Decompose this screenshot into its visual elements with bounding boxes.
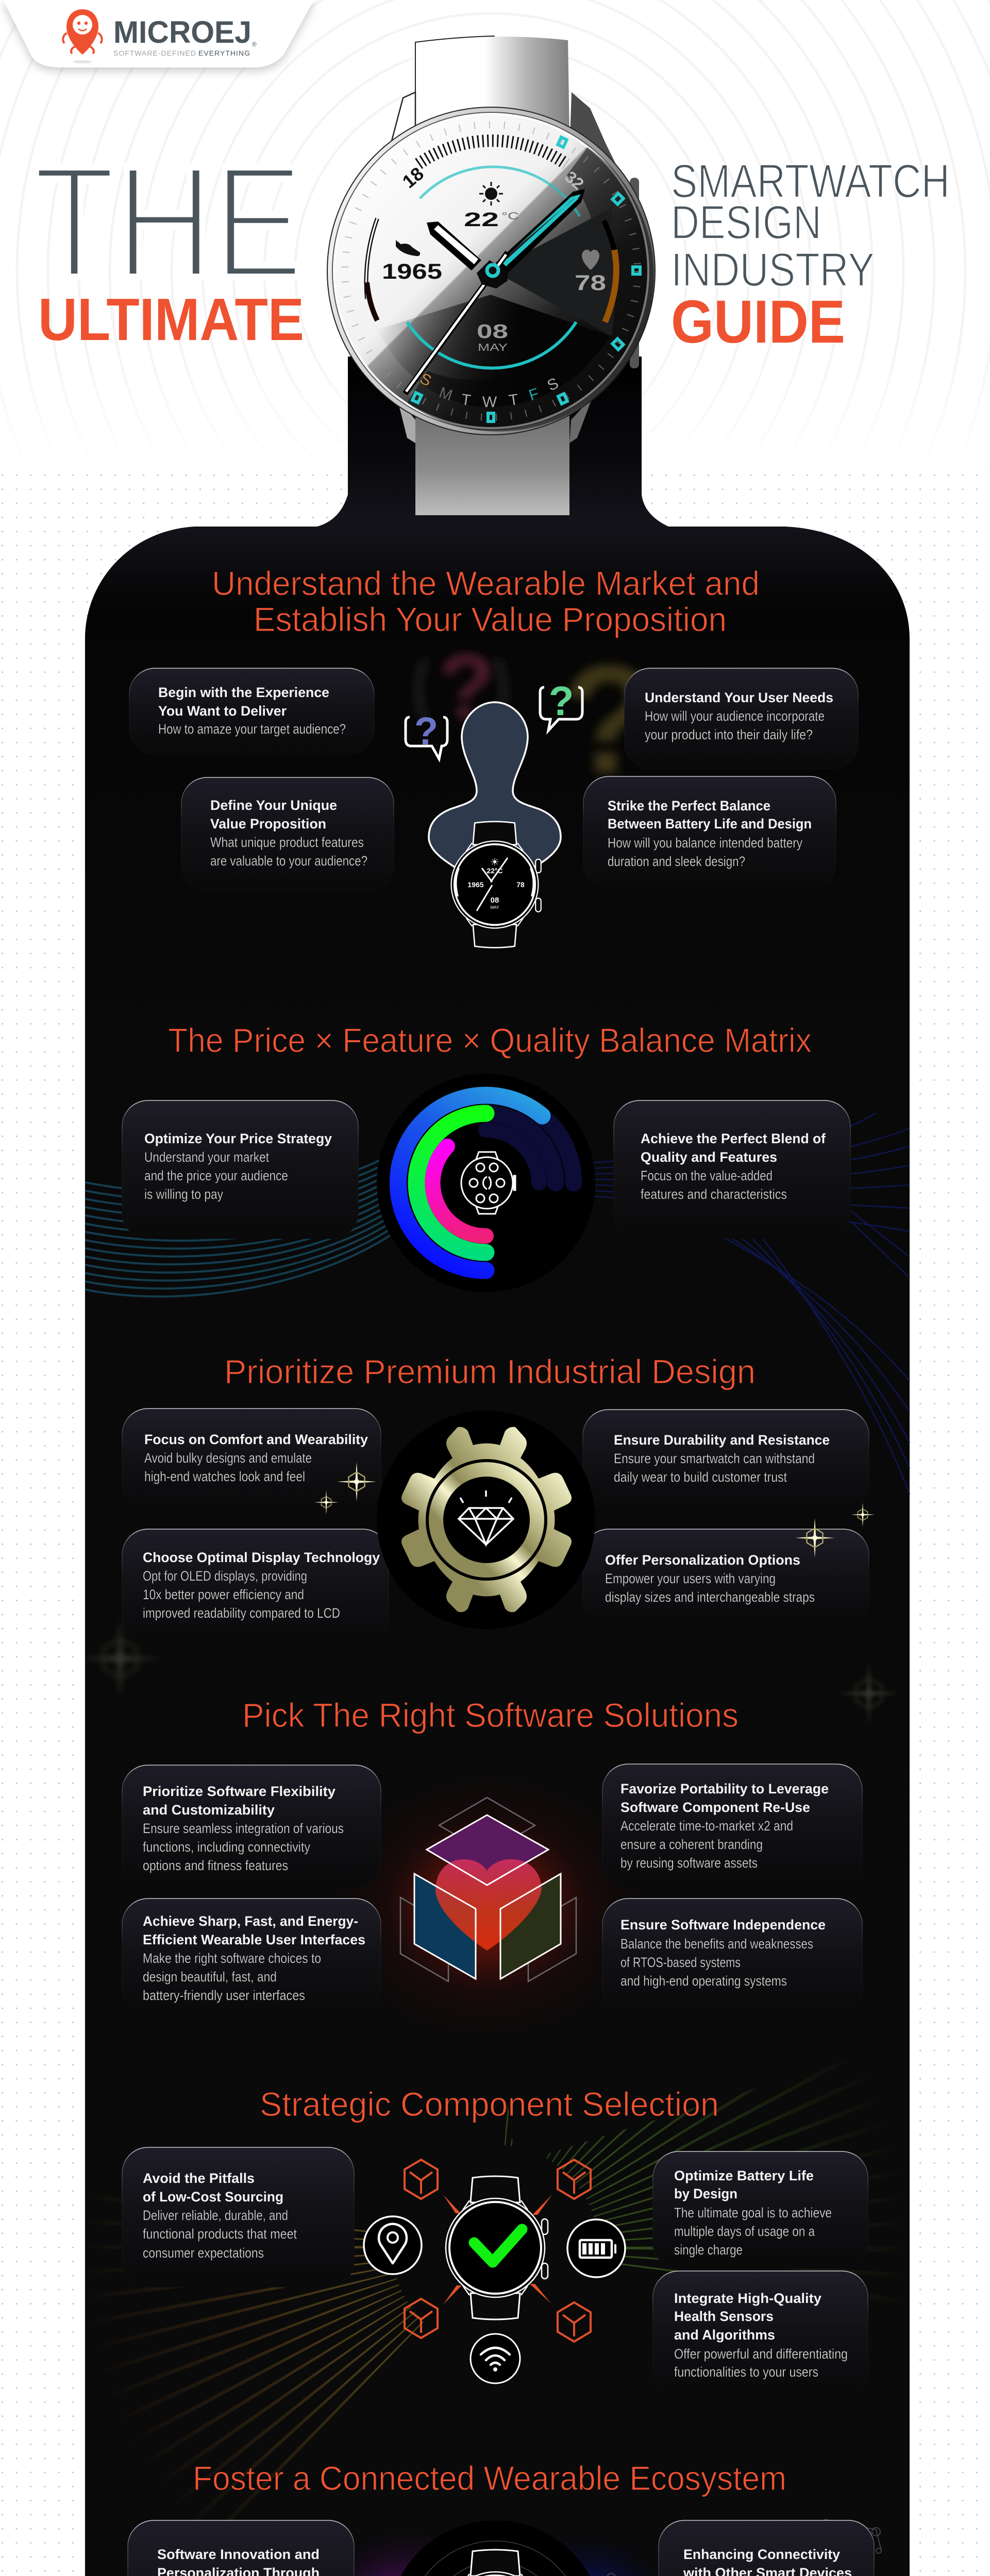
weekdays: T — [508, 391, 519, 409]
background: concentric rings — [0, 0, 990, 378]
gauge label 32: 32 — [562, 167, 588, 193]
card: app ecosystems — [128, 2520, 354, 2576]
card: achieve the perfect blend: Achieve the Perfect Blend of — [641, 1131, 826, 1146]
card: optimal display technology: Opt for OLED displays, providing — [143, 1568, 307, 1584]
icon: hexagon top left — [405, 2160, 438, 2199]
card: software independence: Ensure Software Independence — [620, 1917, 826, 1933]
card: optimal display technology — [122, 1529, 389, 1643]
card: sharp fast interfaces: Efficient Wearable User Interfaces — [143, 1932, 365, 1947]
icon: watch with share — [387, 2520, 603, 2576]
card: software independence: of RTOS-based systems — [620, 1955, 741, 1970]
card: low-cost sourcing: of Low-Cost Sourcing — [143, 2189, 283, 2205]
card: comfort and wearability: Focus on Comfort and Wearability — [144, 1432, 368, 1447]
gauge label 18: 18 — [398, 163, 428, 192]
card: define your unique value proposition — [181, 777, 394, 890]
card: software independence: Balance the benefits and weaknesses — [620, 1936, 813, 1952]
outer dark ring — [407, 147, 654, 432]
icon: green question bubble: ? — [549, 678, 574, 724]
dark content panel — [85, 357, 910, 2576]
weekdays: F — [527, 385, 541, 404]
blurred background question marks: ? — [438, 635, 495, 739]
hero smartwatch — [327, 36, 655, 515]
card: optimize your price strategy: Optimize Your Price Strategy — [144, 1131, 332, 1146]
heading: component selection: Strategic Component Selection — [260, 2085, 719, 2123]
hour hand — [427, 222, 481, 270]
card: portability and re-use: Software Component Re-Use — [620, 1800, 810, 1815]
card: durability and resistance: daily wear to build customer trust — [614, 1469, 787, 1485]
card: understand your user needs: Understand Your User Needs — [645, 690, 833, 705]
card: begin with the experience: You Want to Deliver — [158, 703, 287, 719]
header: logo tab: EVERYTHING — [198, 49, 250, 57]
card: software flexibility: Prioritize Software Flexibility — [143, 1784, 335, 1799]
card: strike the perfect balance: How will you balance intended battery — [608, 835, 803, 851]
crowns — [630, 178, 639, 224]
card: optimal display technology: Choose Optimal Display Technology — [143, 1550, 380, 1565]
heading: connected ecosystem: Foster a Connected Wearable Ecosystem — [193, 2459, 786, 2497]
card: optimal display technology: 10x better power efficiency and — [143, 1587, 304, 1602]
icon: watch on person: 78 — [516, 880, 525, 889]
cyan bezel markers — [412, 137, 640, 421]
icon: watch on person: MAY — [491, 905, 499, 910]
icon: green question bubble — [540, 678, 582, 731]
background: radiating rays — [227, 1980, 763, 2516]
weather icon — [479, 182, 503, 206]
icon: sparkle right small — [850, 1502, 875, 1527]
card: define your unique value proposition: Define Your Unique — [210, 798, 337, 813]
card: health sensors: Integrate High-Quality — [674, 2291, 821, 2306]
date — [477, 321, 508, 353]
icon: sparkle lower left — [314, 1490, 339, 1515]
card: understand your user needs — [625, 668, 858, 769]
card: software flexibility: Ensure seamless integration of various — [143, 1821, 344, 1836]
blurred background question marks: ? — [562, 633, 656, 806]
title: THE: THE — [33, 132, 304, 311]
icon: small watch in rings — [461, 1152, 515, 1214]
icon: battery — [567, 2219, 625, 2277]
card: sharp fast interfaces: design beautiful, fast, and — [143, 1969, 277, 1985]
title: INDUSTRY: INDUSTRY — [671, 244, 875, 296]
card: low-cost sourcing: Deliver reliable, durable, and — [143, 2208, 288, 2223]
heading: understand the wearable market — [212, 564, 760, 638]
background: navy waves — [582, 1113, 910, 1494]
step gauge — [366, 218, 377, 320]
card: low-cost sourcing: Avoid the Pitfalls — [143, 2171, 255, 2186]
title: DESIGN: DESIGN — [671, 196, 821, 249]
icon: gold gear with diamond — [377, 1411, 595, 1629]
center hub — [477, 260, 508, 289]
card: software flexibility — [122, 1765, 381, 1887]
date: 08 — [477, 321, 508, 343]
glow: blue — [487, 2530, 683, 2576]
card: battery life — [653, 2151, 868, 2268]
card: health sensors: functionalities to your users — [674, 2364, 818, 2380]
card: optimize your price strategy: Understand your market — [144, 1149, 270, 1165]
card: achieve the perfect blend: Quality and Features — [641, 1149, 777, 1165]
icon: watch on person — [451, 822, 541, 947]
icon: exploded cube with heart — [400, 1798, 576, 1981]
icon: blue question bubble — [406, 709, 447, 759]
card: comfort and wearability: high-end watches look and feel — [144, 1469, 305, 1484]
card: portability and re-use — [602, 1764, 862, 1888]
icon: hexagon top right — [558, 2160, 591, 2199]
icon: wifi — [471, 2334, 520, 2383]
icon: heart — [582, 250, 599, 270]
card: software flexibility: options and fitness features — [143, 1858, 288, 1873]
heading: understand the wearable market: Establish Your Value Proposition — [254, 600, 727, 638]
card: portability and re-use: Accelerate time-to-market x2 and — [620, 1818, 793, 1834]
card: low-cost sourcing: functional products that meet — [143, 2226, 297, 2242]
card: durability and resistance — [583, 1410, 869, 1510]
card: personalization options — [583, 1529, 869, 1625]
card: battery life: multiple days of usage on a — [674, 2224, 815, 2239]
icon: hexagon bottom left — [405, 2299, 438, 2338]
panel: connected wearable ecosystem — [128, 2459, 881, 2576]
weekdays: W — [482, 394, 497, 411]
card: health sensors: Health Sensors — [674, 2309, 774, 2324]
card: smart device connectivity: Enhancing Connectivity — [683, 2547, 840, 2562]
weekdays: S — [417, 370, 434, 390]
card: define your unique value proposition: What unique product features — [210, 835, 364, 850]
date: MAY — [478, 342, 508, 353]
heading: premium industrial design: Prioritize Premium Industrial Design — [224, 1352, 756, 1391]
weekdays: T — [460, 391, 472, 409]
temperature — [464, 209, 519, 231]
icon: watch with check — [446, 2176, 548, 2319]
icon: watch on person: 08 — [491, 896, 499, 905]
card: software flexibility: and Customizability — [143, 1802, 275, 1818]
icon: location pin — [364, 2216, 422, 2274]
right sector — [493, 208, 618, 336]
card: personalization options: display sizes and interchangeable straps — [605, 1589, 815, 1605]
icon: orange connectors — [443, 2195, 552, 2304]
glow: purple — [309, 2530, 505, 2576]
card: define your unique value proposition: are valuable to your audience? — [210, 853, 367, 869]
heading: price feature quality: The Price × Feature × Quality Balance Matrix — [168, 1021, 812, 1059]
strap bottom — [415, 412, 569, 515]
strap top — [415, 37, 569, 134]
heart gauge — [604, 221, 616, 322]
card: strike the perfect balance — [583, 776, 836, 888]
card: optimize your price strategy: and the price your audience — [144, 1168, 288, 1183]
card: optimize your price strategy — [122, 1100, 358, 1239]
heading: understand the wearable market: Understand the Wearable Market and — [212, 564, 760, 602]
card: durability and resistance: Ensure your smartwatch can withstand — [614, 1451, 815, 1466]
card: comfort and wearability — [122, 1409, 381, 1509]
case lugs — [350, 92, 415, 232]
card: portability and re-use: Favorize Portability to Leverage — [620, 1781, 829, 1797]
card: battery life: by Design — [674, 2186, 737, 2201]
card: smart device connectivity — [659, 2520, 874, 2576]
card: battery life: single charge — [674, 2242, 743, 2258]
panel: right software solutions — [122, 1696, 862, 2050]
card: health sensors: Offer powerful and differentiating — [674, 2346, 848, 2362]
card: battery life: Optimize Battery Life — [674, 2168, 814, 2183]
icon: blue question bubble: ? — [414, 709, 438, 753]
weekdays: M — [437, 384, 455, 404]
card: durability and resistance: Ensure Durability and Resistance — [614, 1432, 830, 1448]
chart: activity rings — [377, 1074, 595, 1292]
panel: strategic component selection — [122, 2085, 868, 2395]
card: achieve the perfect blend — [614, 1100, 850, 1239]
header: logo tab — [3, 0, 314, 67]
card: strike the perfect balance: Strike the Perfect Balance — [608, 798, 770, 814]
temperature: 22 — [464, 209, 499, 231]
icon: person silhouette — [429, 702, 561, 871]
card: optimize your price strategy: is willing to pay — [144, 1187, 224, 1202]
card: battery life: The ultimate goal is to achieve — [674, 2205, 832, 2221]
card: achieve the perfect blend: features and characteristics — [641, 1187, 787, 1202]
header: logo tab: ® — [252, 41, 257, 48]
weekdays: S — [545, 375, 561, 395]
card: health sensors: and Algorithms — [674, 2327, 775, 2343]
card: software independence: and high-end operating systems — [620, 1973, 787, 1989]
glow: red behind heart — [317, 1762, 657, 2050]
icon: blurred sparkle left — [78, 1617, 162, 1700]
watch face — [335, 115, 647, 427]
panel: premium industrial design — [78, 1352, 901, 1725]
card: personalization options: Empower your users with varying — [605, 1571, 776, 1586]
top tick gauge — [418, 141, 566, 164]
card: health sensors — [653, 2271, 868, 2395]
bottom sector — [376, 295, 612, 407]
heart rate: 78 — [575, 270, 606, 295]
card: sharp fast interfaces: Make the right software choices to — [143, 1951, 321, 1966]
header: logo tab: MICROEJ — [113, 15, 251, 49]
cyan ring — [407, 167, 580, 368]
card: begin with the experience — [129, 668, 374, 754]
card: comfort and wearability: Avoid bulky designs and emulate — [144, 1450, 312, 1466]
weekdays — [417, 370, 561, 411]
card: strike the perfect balance: duration and sleek design? — [608, 854, 745, 869]
card: software flexibility: functions, including connectivity — [143, 1839, 311, 1855]
card: optimal display technology: improved readability compared to LCD — [143, 1605, 340, 1621]
icon: sparkle right large — [795, 1518, 834, 1557]
card: software independence — [602, 1899, 862, 2013]
icon: blurred sparkle right — [837, 1662, 901, 1725]
card: strike the perfect balance: Between Battery Life and Design — [608, 816, 812, 832]
blurred background question marks — [418, 633, 656, 806]
card: portability and re-use: by reusing software assets — [620, 1855, 758, 1871]
header: logo tab: SOFTWARE-DEFINED — [113, 49, 196, 57]
step count: 1965 — [382, 259, 442, 283]
case bezel — [327, 107, 655, 435]
card: app ecosystems: Software Innovation and — [157, 2547, 320, 2562]
minute hand — [496, 189, 585, 276]
card: low-cost sourcing: consumer expectations — [143, 2245, 264, 2261]
card: sharp fast interfaces: battery-friendly user interfaces — [143, 1988, 305, 2003]
bezel ticks — [345, 125, 637, 417]
card: portability and re-use: ensure a coherent branding — [620, 1837, 763, 1852]
icon: shoe — [396, 240, 420, 256]
heading: software solutions: Pick The Right Software Solutions — [242, 1696, 739, 1734]
card: low-cost sourcing — [122, 2147, 354, 2287]
title: ULTIMATE: ULTIMATE — [38, 286, 304, 353]
panel: price feature quality matrix — [85, 1021, 910, 1494]
card: achieve the perfect blend: Focus on the value-added — [641, 1168, 773, 1183]
card: begin with the experience: Begin with the Experience — [158, 685, 329, 700]
card: sharp fast interfaces — [122, 1899, 381, 2013]
title: GUIDE: GUIDE — [671, 288, 845, 356]
card: understand your user needs: How will your audience incorporate — [645, 708, 825, 724]
card: understand your user needs: your product into their daily life? — [645, 727, 813, 742]
temperature: °C — [501, 211, 519, 222]
panel: understand the wearable market — [129, 564, 858, 947]
icon: watch on person: 1965 — [467, 880, 484, 889]
icon: sparkle bottom of comfort card — [337, 1462, 376, 1501]
card: begin with the experience: How to amaze your target audience? — [158, 721, 346, 737]
card: define your unique value proposition: Value Proposition — [210, 816, 326, 832]
icon: watch on person: 22°C — [486, 867, 503, 875]
card: sharp fast interfaces: Achieve Sharp, Fast, and Energy- — [143, 1913, 358, 1929]
icon: hexagon bottom right — [558, 2302, 591, 2342]
network lines — [572, 2519, 881, 2576]
second hand — [405, 252, 508, 394]
card: personalization options: Offer Personalization Options — [605, 1552, 800, 1568]
icon: watch on person: ☀ — [490, 857, 499, 868]
background: teal waves — [85, 1154, 392, 1297]
